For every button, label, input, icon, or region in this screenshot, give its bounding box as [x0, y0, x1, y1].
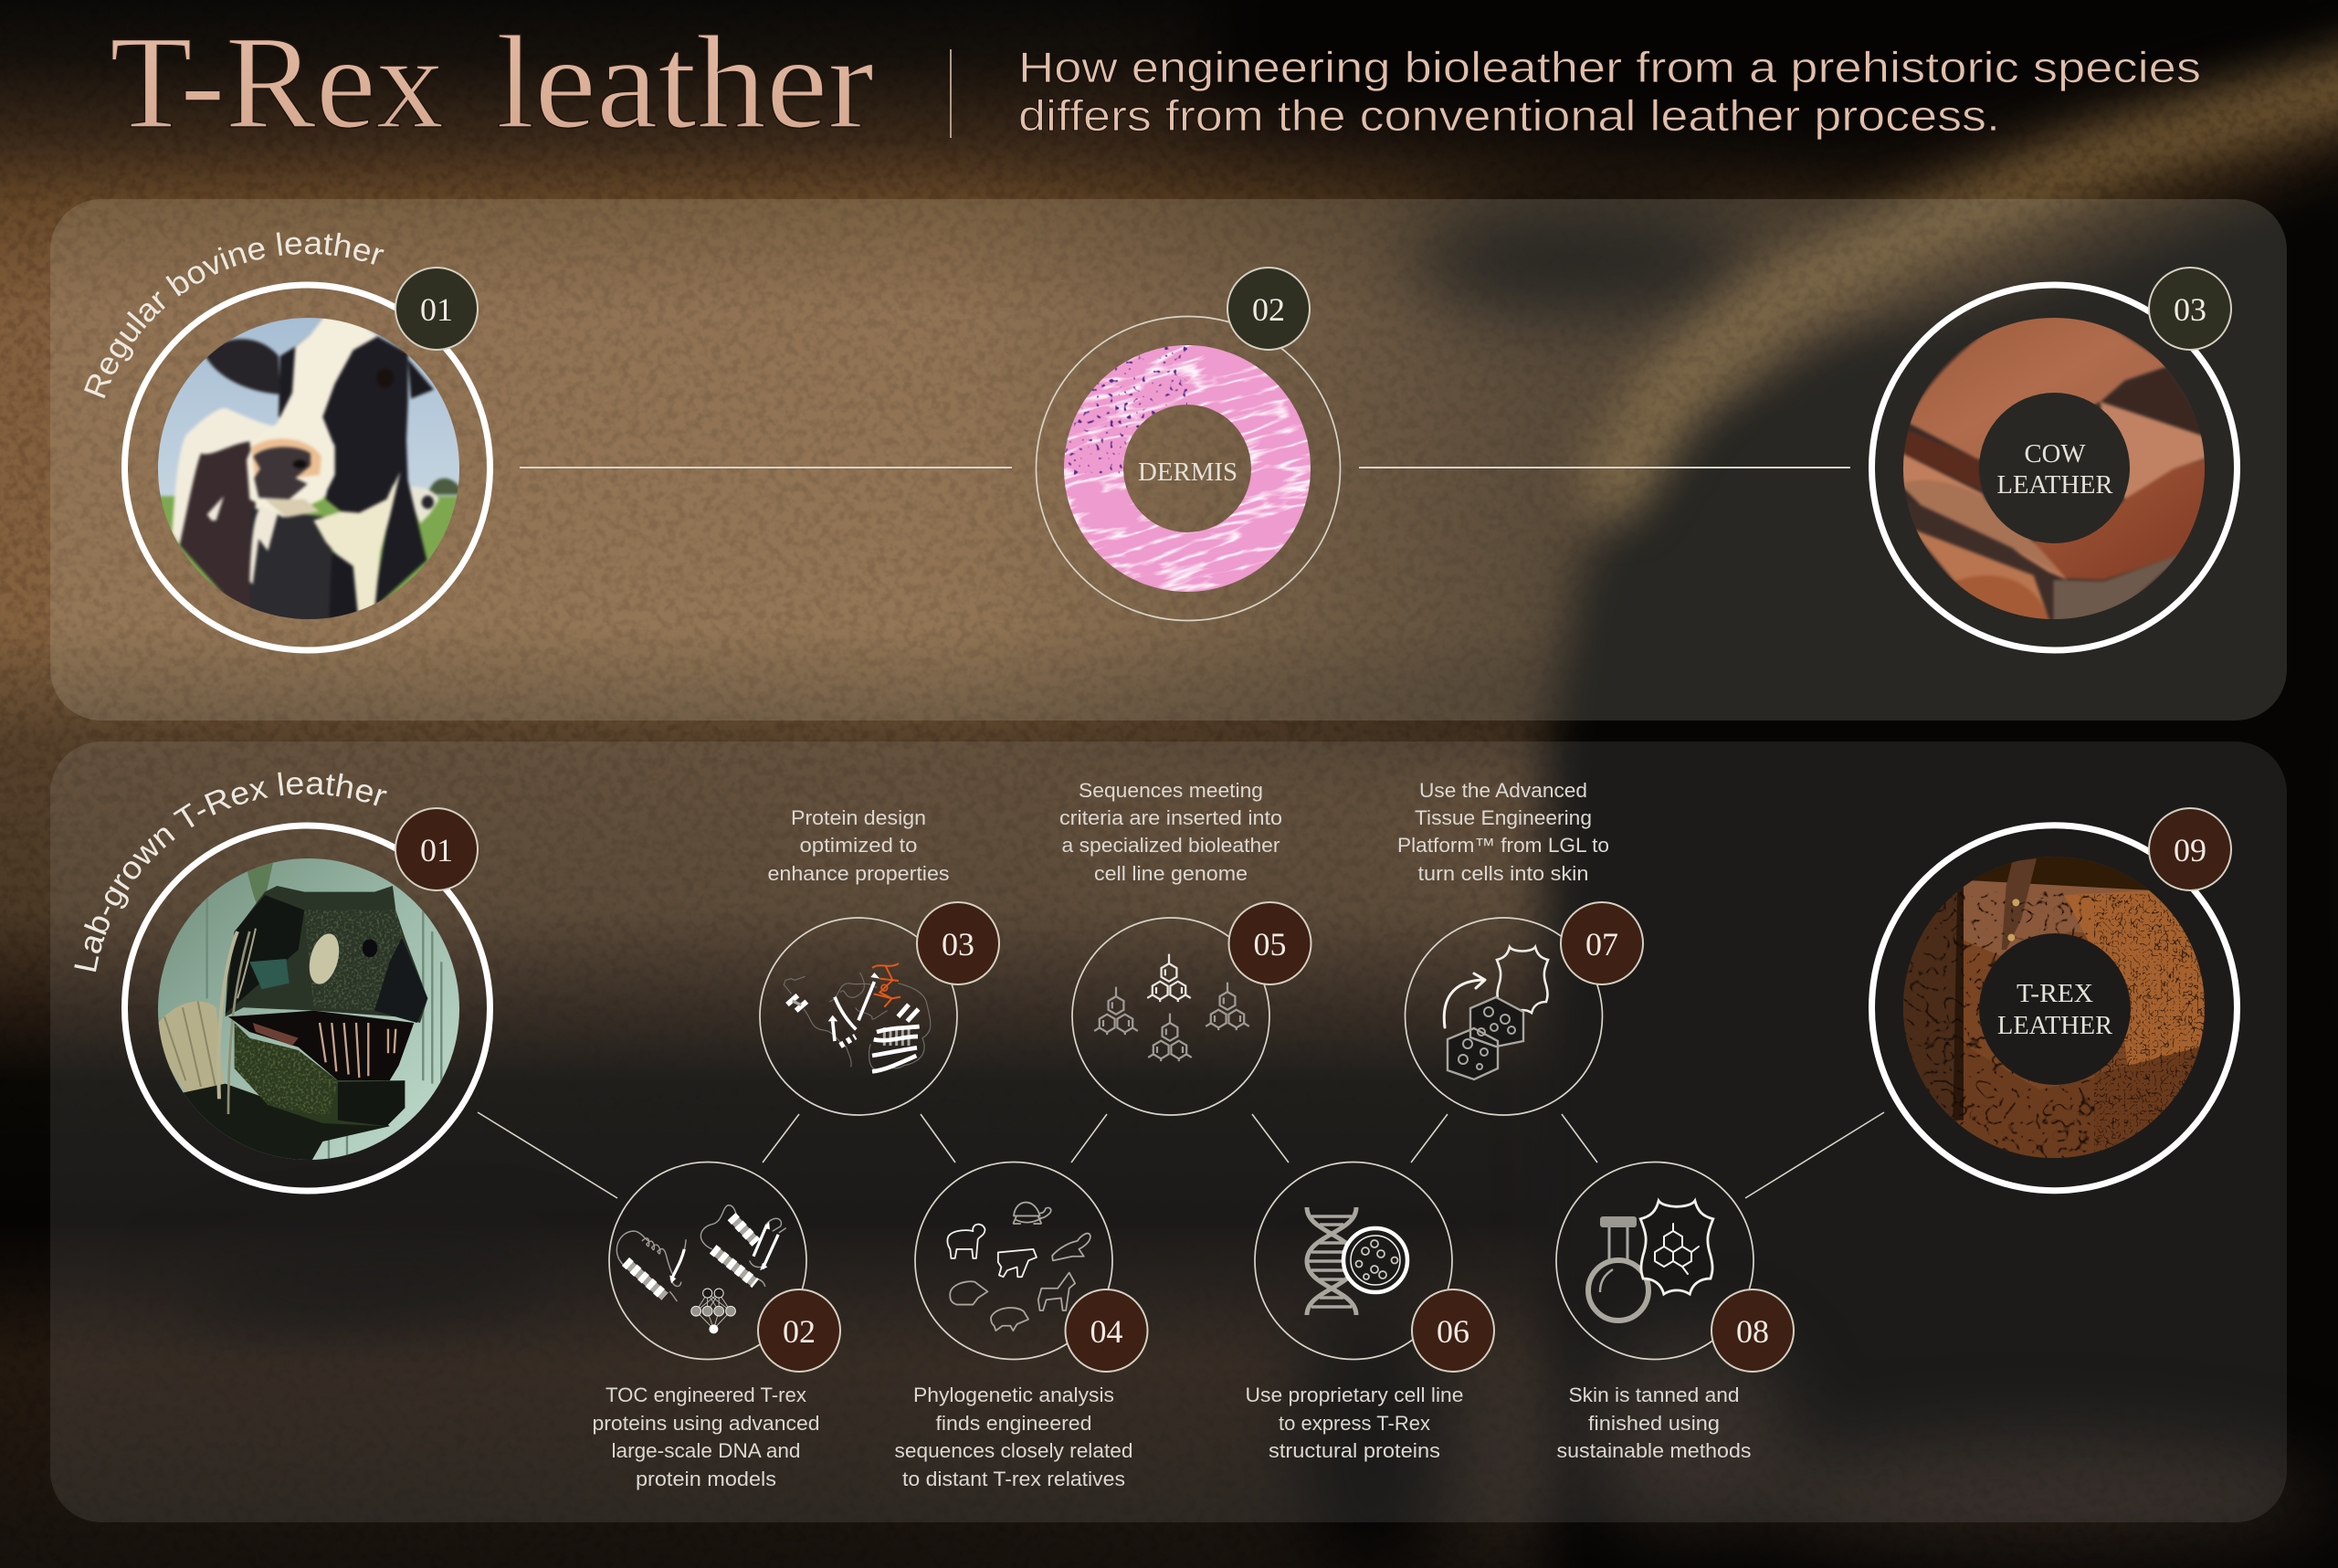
number badge 09 — [2149, 808, 2231, 890]
number badge 03: 03 — [942, 926, 974, 963]
number badge 02 — [758, 1289, 840, 1372]
photo: dermis tissue ring — [1064, 345, 1311, 592]
number badge 09: 09 — [2174, 832, 2206, 868]
caption 03 — [767, 806, 950, 885]
white ring — [1872, 826, 2238, 1191]
animal: pig — [991, 1308, 1028, 1331]
subtitle: How engineering bioleather from a prehistoric species — [1018, 43, 2201, 91]
number badge 01 — [395, 268, 478, 350]
curved label: regular bovine leather: Regular bovine leather — [84, 232, 384, 398]
thin ring — [1036, 316, 1341, 621]
animal: turtle — [1013, 1203, 1051, 1224]
step 02 — [592, 1162, 840, 1490]
caption 07: turn cells into skin — [1417, 862, 1589, 885]
icon: protein models — [616, 1205, 786, 1333]
label: cow leather: COW — [2024, 439, 2086, 468]
thin ring — [1255, 1162, 1452, 1359]
white ring — [124, 826, 490, 1191]
number badge 01: 01 — [420, 291, 453, 328]
step 05 — [1059, 779, 1311, 1115]
white ring — [1872, 285, 2238, 650]
number badge 04 — [1065, 1289, 1147, 1372]
number badge 05: 05 — [1253, 926, 1286, 963]
caption 02: TOC engineered T-rex — [606, 1384, 806, 1406]
photo: T-Rex leather bag — [1900, 852, 2210, 1163]
number badge 03 — [917, 902, 999, 984]
icon: cells to skin — [1444, 947, 1548, 1079]
thin ring — [1072, 918, 1269, 1115]
caption 06 — [1246, 1384, 1463, 1462]
caption 04: to distant T-rex relatives — [902, 1468, 1125, 1490]
caption 02: proteins using advanced — [592, 1412, 820, 1435]
caption 03: Protein design — [791, 806, 926, 829]
animal: cow — [998, 1249, 1037, 1277]
step 08 — [1556, 1162, 1794, 1462]
white ring — [124, 285, 490, 650]
animal: hamster — [950, 1281, 987, 1305]
caption 04: finds engineered — [935, 1412, 1092, 1435]
subtitle: differs from the conventional leather process. — [1018, 91, 2000, 140]
caption 02: large-scale DNA and — [612, 1439, 800, 1462]
label: T-Rex leather: T-REX — [2017, 979, 2093, 1008]
step 06 — [1246, 1162, 1494, 1462]
step 03 — [760, 806, 999, 1115]
icon: animal relatives — [947, 1203, 1090, 1331]
caption 05: cell line genome — [1094, 862, 1248, 885]
number badge 06: 06 — [1437, 1313, 1469, 1350]
thin ring — [1556, 1162, 1754, 1359]
number badge 08 — [1711, 1289, 1794, 1372]
icon: molecules — [1094, 954, 1249, 1061]
animal: sheep — [947, 1225, 985, 1258]
title divider — [950, 49, 952, 138]
step: cow photo — [124, 268, 490, 650]
caption 06: Use proprietary cell line — [1246, 1384, 1463, 1406]
photo: cow leather folds — [1903, 318, 2205, 619]
step: dermis — [1036, 267, 1341, 621]
caption 03: enhance properties — [767, 862, 950, 885]
icon: protein design — [784, 963, 931, 1071]
label: T-Rex leather: LEATHER — [1997, 1011, 2113, 1040]
caption 06: to express T-Rex — [1279, 1412, 1430, 1435]
photo: cow — [158, 318, 459, 619]
number badge 02 — [1227, 268, 1310, 350]
label: cow leather: LEATHER — [1996, 470, 2113, 500]
number badge 01: 01 — [420, 832, 453, 868]
caption 08: Skin is tanned and — [1569, 1384, 1739, 1406]
step: cow leather — [1872, 268, 2238, 650]
caption 04: sequences closely related — [895, 1439, 1132, 1462]
animal: horse — [1038, 1273, 1075, 1310]
thin ring — [609, 1162, 806, 1359]
caption 07: Platform™ from LGL to — [1397, 834, 1609, 857]
icon: flask and tanned hide — [1588, 1201, 1713, 1321]
curved label: lab-grown T-Rex leather: Lab-grown T-Rex leather — [74, 773, 387, 972]
number badge 02: 02 — [783, 1313, 816, 1350]
caption 08 — [1556, 1384, 1752, 1462]
caption 06: structural proteins — [1269, 1439, 1440, 1462]
title: leather — [496, 8, 874, 156]
connectors between steps — [478, 1112, 1884, 1198]
caption 07 — [1397, 779, 1609, 885]
caption 05: criteria are inserted into — [1059, 806, 1282, 829]
label: cow leather — [1996, 439, 2113, 500]
step 09: T-Rex leather — [1872, 808, 2238, 1191]
connector: cow to dermis — [520, 467, 1012, 468]
number badge 04: 04 — [1090, 1313, 1123, 1350]
caption 04 — [895, 1384, 1132, 1490]
caption 05 — [1059, 779, 1282, 885]
number badge 08: 08 — [1736, 1313, 1769, 1350]
number badge 01 — [395, 808, 478, 890]
connector: dermis to cow leather — [1359, 467, 1850, 468]
number badge 07: 07 — [1585, 926, 1618, 963]
thin ring — [915, 1162, 1112, 1359]
number badge 06 — [1412, 1289, 1494, 1372]
panel: regular bovine leather — [50, 199, 2287, 721]
caption 08: sustainable methods — [1556, 1439, 1752, 1462]
number badge 03: 03 — [2174, 291, 2206, 328]
animal: frog — [1052, 1234, 1090, 1260]
step 04 — [895, 1162, 1147, 1490]
caption 03: optimized to — [800, 834, 917, 857]
title: T-Rex — [110, 8, 444, 156]
caption 04: Phylogenetic analysis — [913, 1384, 1114, 1406]
photo: t-rex — [155, 856, 463, 1163]
label: T-Rex leather — [1997, 979, 2113, 1040]
number badge 03 — [2149, 268, 2231, 350]
caption 08: finished using — [1588, 1412, 1720, 1435]
caption 05: Sequences meeting — [1079, 779, 1263, 802]
number badge 07 — [1561, 902, 1643, 984]
caption 07: Use the Advanced — [1419, 779, 1587, 802]
label: dermis: DERMIS — [1138, 458, 1237, 487]
caption 02: protein models — [636, 1468, 776, 1490]
thin ring — [760, 918, 957, 1115]
subtitle — [1018, 43, 2201, 140]
icon: DNA and cell dish — [1307, 1207, 1407, 1315]
step 01: T-Rex photo — [124, 808, 490, 1191]
panel: lab-grown T-Rex leather — [50, 742, 2287, 1522]
caption 07: Tissue Engineering — [1415, 806, 1592, 829]
step 07 — [1397, 779, 1643, 1115]
number badge 05 — [1229, 902, 1311, 984]
number badge 02: 02 — [1252, 291, 1285, 328]
caption 05: a specialized bioleather — [1061, 834, 1280, 857]
thin ring — [1405, 918, 1602, 1115]
caption 02 — [592, 1384, 820, 1490]
title — [110, 8, 874, 156]
